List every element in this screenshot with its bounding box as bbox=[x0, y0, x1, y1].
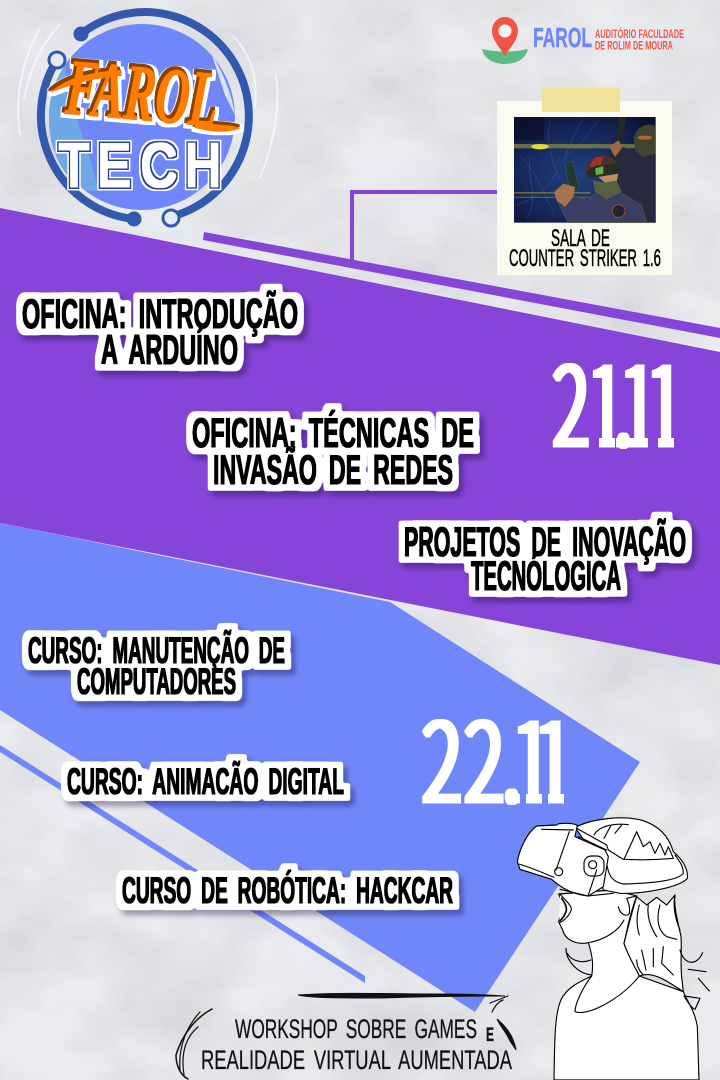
headset front bbox=[517, 823, 608, 896]
logo swishes bbox=[18, 24, 277, 178]
photo card: Counter Strike room bbox=[497, 88, 672, 275]
mouth bbox=[559, 894, 571, 923]
session label: Oficina redes: OFICINA: TÉCNICAS DE bbox=[192, 409, 474, 456]
body and neck bbox=[554, 890, 699, 1080]
session label: Oficina redes bbox=[192, 409, 474, 493]
logo disc bbox=[49, 24, 235, 210]
venue address: DE ROLIM DE MOURA bbox=[595, 38, 673, 52]
logo word: TECH: TECH bbox=[59, 131, 221, 199]
connector bracket to photo card bbox=[352, 192, 499, 262]
game image bbox=[514, 117, 656, 223]
location block bbox=[482, 17, 684, 64]
tape bbox=[542, 88, 620, 112]
card paper bbox=[497, 101, 672, 275]
logo word: FAROL bbox=[50, 44, 241, 145]
ear and jaw bbox=[618, 896, 637, 915]
venue address bbox=[595, 26, 684, 52]
session label: Oficina Arduino: OFICINA: INTRODUÇÃO bbox=[22, 290, 298, 337]
headset strap and hair top bbox=[575, 818, 687, 893]
card caption: SALA DE bbox=[551, 225, 610, 252]
logo ring bbox=[41, 12, 249, 219]
session label: Projetos bbox=[404, 518, 686, 599]
workshop banner bbox=[176, 993, 516, 1079]
session label: Curso manutencao bbox=[28, 629, 285, 702]
session label: Curso manutencao: COMPUTADORES bbox=[77, 661, 236, 702]
banner text: REALIDADE VIRTUAL AUMENTADA bbox=[201, 1045, 512, 1075]
banner text: E bbox=[486, 1025, 494, 1046]
session label: Curso animacao: CURSO: ANIMACÃO DIGITAL bbox=[67, 760, 344, 802]
venue name: FAROL bbox=[533, 22, 592, 53]
illustration: woman wearing VR headset bbox=[517, 818, 709, 1080]
banner text: WORKSHOP SOBRE GAMES bbox=[235, 1014, 477, 1044]
blue accent stripe bbox=[0, 745, 365, 983]
hair bbox=[624, 895, 683, 992]
banner text bbox=[201, 1014, 512, 1075]
session label: Oficina redes: INVASÃO DE REDES bbox=[213, 446, 453, 493]
session label: Oficina Arduino bbox=[22, 290, 298, 373]
logo word: FAROL: FAROL bbox=[62, 44, 222, 145]
card caption bbox=[509, 225, 661, 272]
blue diagonal panel bbox=[0, 523, 640, 1012]
date: 22.11: 22.11 bbox=[421, 673, 575, 836]
icon: location pin bbox=[482, 17, 528, 64]
session label: Oficina Arduino: A ARDUÍNO bbox=[101, 326, 238, 373]
disc light areas bbox=[49, 65, 98, 191]
session label: Curso manutencao: CURSO: MANUTENÇÃO DE bbox=[28, 629, 285, 671]
brush frame bbox=[176, 993, 516, 1079]
logo: Farol Tech bbox=[18, 12, 277, 226]
purple accent stripe bbox=[203, 232, 720, 338]
purple diagonal band bbox=[0, 208, 720, 665]
neck and collar lines bbox=[575, 976, 639, 1013]
date: 21.11: 21.11 bbox=[552, 317, 684, 479]
